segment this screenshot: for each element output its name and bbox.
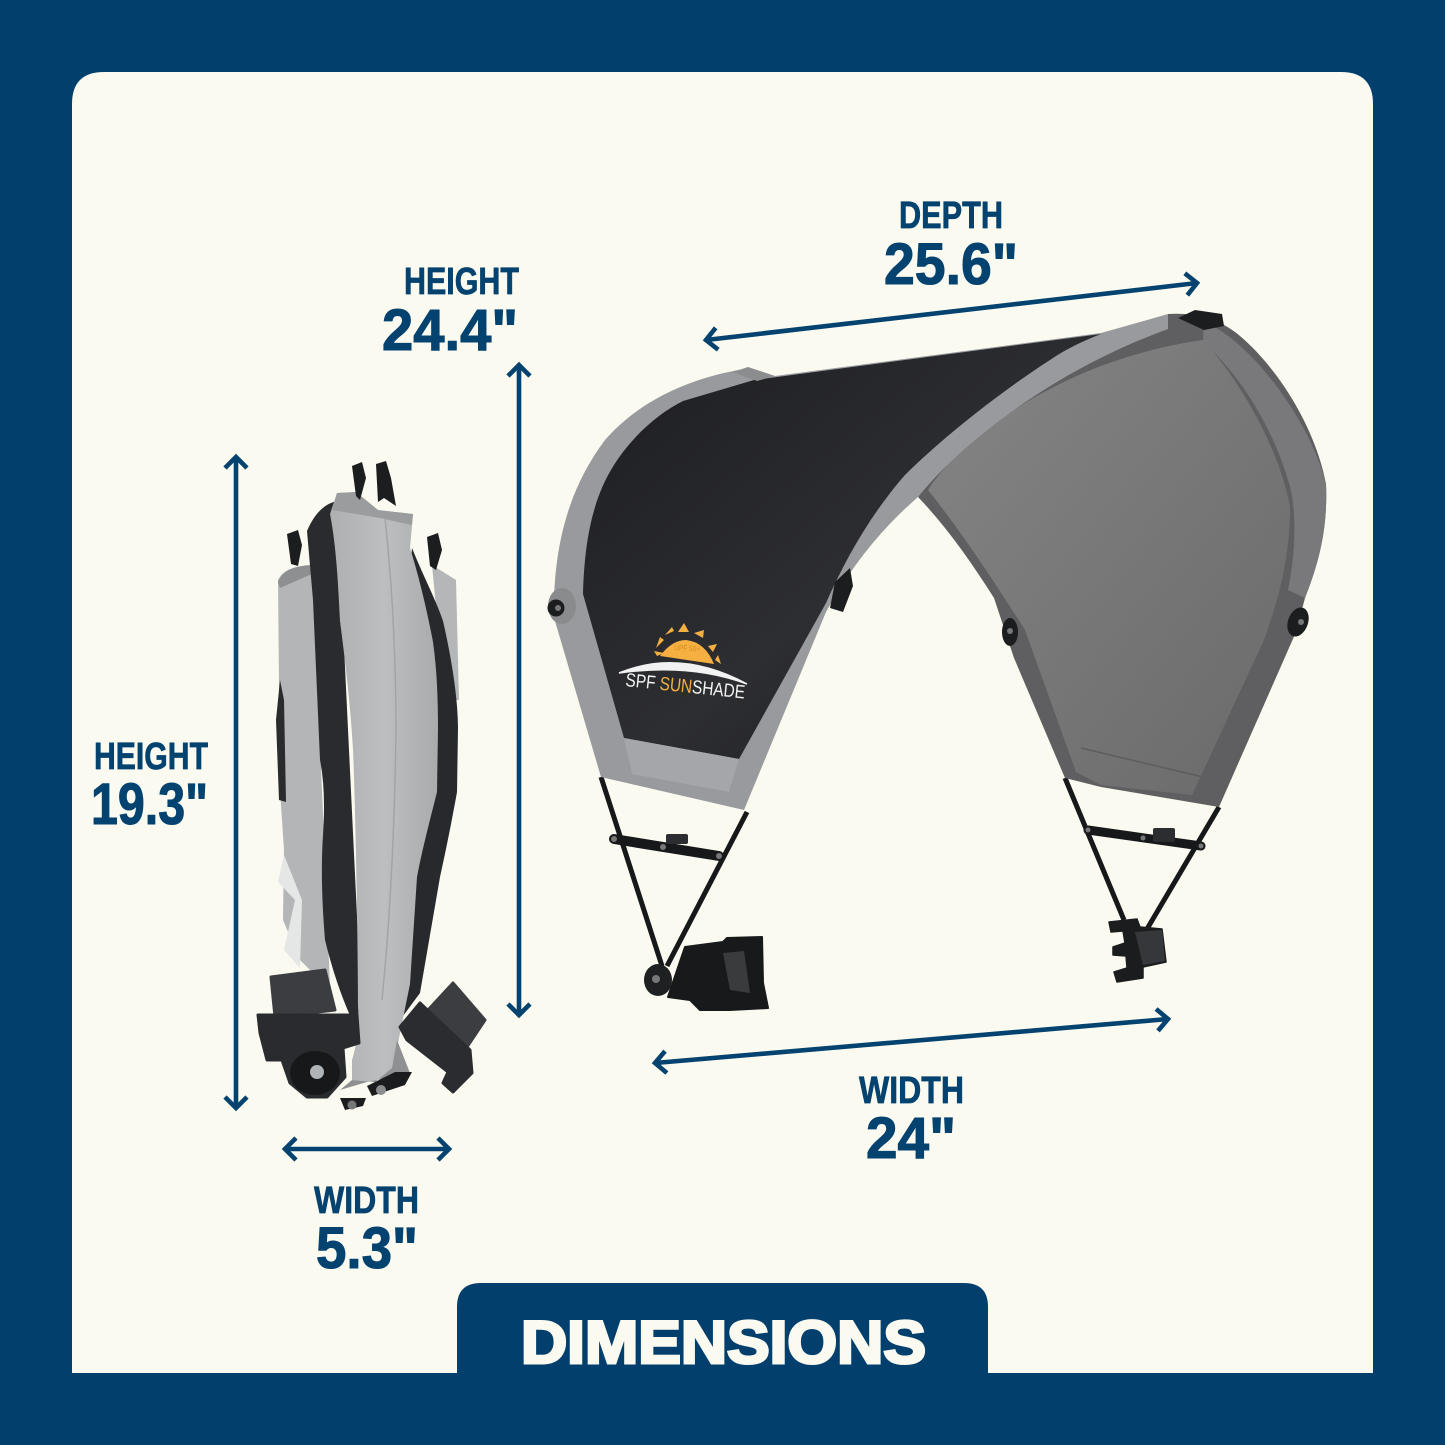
hem stitch (1081, 748, 1203, 777)
label: open width: WIDTH (859, 1070, 964, 1112)
logo: SPF SunShade: UPF 50+ (674, 643, 701, 654)
left gray band (554, 314, 1168, 810)
label: folded width: WIDTH (314, 1180, 419, 1222)
arrow: open width (655, 1019, 1168, 1063)
back strap (276, 680, 286, 802)
black layer left (307, 501, 362, 1020)
title: DIMENSIONS (521, 1309, 926, 1376)
black panel (583, 334, 1101, 759)
center mesh top (332, 492, 413, 525)
arrow: folded width (285, 1147, 449, 1151)
label: folded height: 19.3" (91, 772, 208, 837)
hinge: upper left (733, 367, 775, 381)
arrow: depth (706, 283, 1197, 340)
hinge: left (548, 588, 576, 624)
label: open width (859, 1070, 964, 1171)
arrow: folded height (234, 457, 238, 1108)
right frame band (1203, 322, 1326, 598)
right gray panel (432, 565, 459, 700)
label: open width: 24" (866, 1106, 956, 1171)
logo: SPF SunShade: SPF SUNSHADE (624, 670, 746, 704)
product: folded sunshade (258, 461, 485, 1110)
hinge: front (830, 568, 853, 612)
arm: right support frame (1065, 778, 1219, 982)
bottom hem (624, 738, 739, 792)
bottom hardware (340, 1040, 412, 1110)
label: depth: DEPTH (899, 195, 1003, 237)
product: open sunshade canopy (548, 310, 1326, 1010)
left clip (258, 970, 359, 1097)
black layer right (400, 548, 458, 1016)
label: folded height (91, 736, 208, 837)
center gray fold (330, 492, 438, 1082)
arm: left support frame (601, 777, 768, 1010)
hinge: mid right (1002, 618, 1018, 646)
seam (382, 518, 396, 1000)
right lighter panel (928, 340, 1290, 795)
label: open height (382, 261, 519, 363)
label: folded width (314, 1180, 419, 1281)
label: depth: 25.6" (884, 232, 1018, 297)
arrow: open height (517, 365, 521, 1015)
label: folded height: HEIGHT (94, 736, 208, 778)
back gray panel (278, 565, 330, 990)
hinge: upper right (1178, 310, 1224, 330)
title tab (457, 1283, 988, 1376)
top knobs (287, 461, 442, 570)
hinge: far right (1283, 604, 1313, 640)
right clip (400, 983, 485, 1092)
logo: SPF SunShade (619, 623, 747, 704)
label: depth (884, 195, 1018, 297)
right panel base (918, 314, 1326, 807)
label: open height: 24.4" (382, 298, 518, 363)
label: folded width: 5.3" (316, 1216, 418, 1281)
back panel mesh top (278, 565, 314, 588)
label: open height: HEIGHT (404, 261, 519, 303)
white liner (278, 855, 302, 968)
